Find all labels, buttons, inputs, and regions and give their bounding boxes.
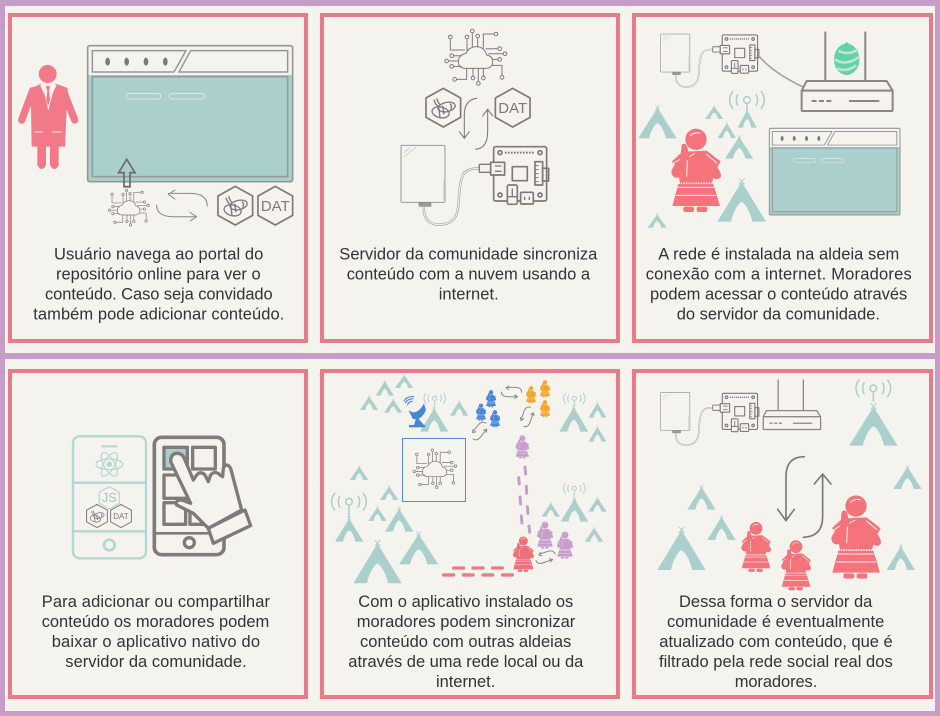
arrows: sync pairs — [468, 386, 557, 567]
text: caption 2: conteúdo com a nuvem usando a — [347, 265, 591, 283]
icon: phone with app stack — [73, 436, 146, 558]
panel frame — [10, 15, 306, 341]
text: caption 6 — [659, 593, 893, 691]
panel frame — [634, 371, 931, 697]
text: caption 4: Para adicionar ou compartilhar — [42, 593, 271, 611]
icon: DAT hexagon: DAT — [261, 198, 290, 215]
arrows: down and up — [778, 457, 831, 537]
text: caption 4: servidor da comunidade. — [65, 653, 247, 671]
box: cloud server — [402, 438, 466, 502]
panel frame — [634, 15, 931, 341]
icon: cloud network — [445, 29, 507, 85]
arrow: up into browser — [119, 159, 135, 187]
panel: server updated eventually — [634, 371, 931, 697]
icon: browser window — [769, 128, 900, 215]
icon: DAT hexagon — [258, 186, 293, 225]
arrows: sync down and up — [459, 98, 493, 149]
text: caption 1 — [33, 245, 284, 323]
text: caption 6: atualizado com conteúdo, que é — [659, 633, 893, 651]
panel frame — [10, 371, 306, 697]
text: caption 2 — [339, 245, 598, 303]
tents: village — [638, 92, 766, 228]
text: caption 3: do servidor da comunidade. — [677, 305, 880, 323]
people: orange group — [526, 380, 550, 417]
text: caption 5 — [348, 593, 584, 691]
icon: browser window — [88, 46, 293, 182]
cable: pi to router — [759, 56, 803, 87]
top band — [5, 6, 935, 353]
text: caption 5: conteúdo com outras aldeias — [360, 633, 571, 651]
text: caption 6: comunidade é eventualmente — [667, 613, 884, 631]
text: caption 6: moradores. — [735, 673, 817, 691]
text: caption 2: Servidor da comunidade sincroniza — [339, 245, 598, 263]
text: caption 5: Com o aplicativo instalado os — [358, 593, 573, 611]
icon: user figure — [22, 65, 75, 169]
icon: bee hexagon — [426, 88, 461, 127]
text: caption 6: filtrado pela rede social real dos — [659, 653, 893, 671]
text: caption 3: podem acessar o conteúdo através — [650, 285, 907, 303]
text: caption 5: moradores podem sincronizar — [357, 613, 576, 631]
text: caption 1: conteúdo. Caso seja convidado — [45, 285, 273, 303]
text: caption 1: Usuário navega ao portal do — [54, 245, 263, 263]
text: caption 6: Dessa forma o servidor da — [679, 593, 873, 611]
panel: browse online portal — [10, 15, 306, 341]
icon: DAT hexagon — [495, 88, 530, 127]
icon: phone with app stack: JS — [102, 491, 117, 505]
panel: network installed in village — [634, 15, 931, 341]
panel: native app — [10, 371, 306, 697]
text: caption 4 — [42, 593, 271, 671]
text: caption 5: internet. — [436, 673, 495, 691]
icon: DAT hexagon: DAT — [498, 100, 527, 117]
icon: hard disk and raspberry pi — [661, 34, 759, 87]
icon: egg logo — [834, 42, 859, 75]
bottom band — [5, 359, 935, 711]
text: caption 4: conteúdo os moradores podem — [42, 613, 269, 631]
icon: hard disk and raspberry pi — [661, 392, 759, 445]
text: caption 5: através de uma rede local ou da — [348, 653, 584, 671]
icon: phone with app stack: DAT — [113, 512, 129, 521]
panel: sync between villages — [322, 371, 618, 697]
icon: cloud network — [108, 189, 149, 226]
panel frame — [322, 371, 618, 697]
text: caption 3: conexão com a internet. Moradores — [646, 265, 912, 283]
route: red dashed link — [444, 568, 512, 575]
icon: router — [763, 380, 821, 430]
people: blue group — [476, 390, 500, 427]
text: caption 3: A rede é instalada na aldeia sem — [658, 245, 899, 263]
icon: bee hexagon — [218, 186, 253, 225]
icon: satellite dish — [404, 397, 426, 427]
text: caption 1: repositório online para ver o — [56, 265, 261, 283]
people: purple group — [515, 435, 573, 559]
text: caption 4: baixar o aplicativo nativo do — [52, 633, 260, 651]
people: three women — [741, 495, 881, 590]
text: caption 2: internet. — [439, 285, 499, 303]
icon: router — [802, 32, 893, 111]
panel: server syncs with cloud — [322, 15, 618, 341]
route: purple dashed link — [519, 467, 530, 532]
person: red figure — [513, 537, 534, 572]
tents: villages — [332, 374, 607, 583]
panel frame — [322, 15, 618, 341]
icon: phone with tapping hand — [154, 437, 251, 555]
tents: village — [657, 380, 922, 570]
icon: hard disk and raspberry pi — [401, 145, 549, 225]
icon: woman figure — [671, 129, 721, 212]
text: caption 1: também pode adicionar conteúdo. — [33, 305, 284, 323]
text: caption 3 — [646, 245, 912, 323]
arrows: sync — [157, 190, 207, 221]
